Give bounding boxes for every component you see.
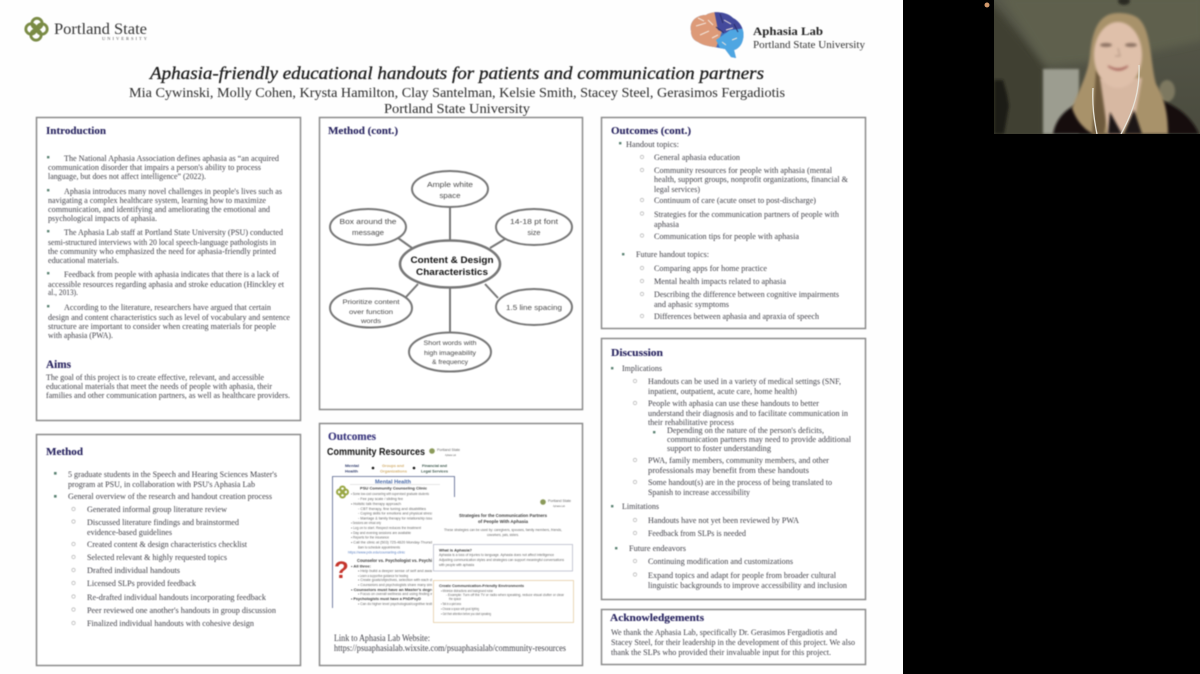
list: implications: their rehabilitative process [648, 418, 734, 427]
handout preview: community resources: Community Resources [327, 447, 425, 458]
list: method steps: Re-drafted individual handouts incorporating feedback [87, 593, 267, 602]
text block: introduction bullets: According to the literature, researchers have argued that certain [64, 303, 272, 312]
logo: Portland State University: Portland State [54, 21, 147, 38]
text block: introduction bullets: educational materials. [48, 256, 119, 265]
list: handout topics: health, support groups, nonprofit organizations, financial & [654, 175, 848, 184]
handout preview: strategies for communication partners: of People With Aphasia [478, 519, 528, 524]
heading: introduction: Introduction [46, 125, 106, 137]
handout preview: community resources: 8am to schedule appointments [358, 546, 400, 550]
list: limitations: Handouts have not yet been reviewed by PWA [648, 516, 799, 525]
text block: introduction bullets: accessible resources regarding aphasia and stroke education (Hinckley et [48, 280, 285, 289]
handout preview: community resources: • Reports for the insurance [351, 536, 389, 540]
handout preview: community resources: • Psychologists must have a PhD/PsyD [351, 597, 421, 601]
panel: method continued [320, 118, 582, 410]
list: handout topics: Strategies for the communication partners of people with [654, 210, 840, 219]
heading: method: Method [46, 446, 83, 458]
text block: aims: The goal of this project is to create effective, relevant, and accessible [46, 373, 264, 382]
list: future handout topics: Future handout topics: [636, 250, 709, 259]
handout preview: strategies for communication partners: - Example: Turn off the TV or radio when speaking, reduce visual clutter or clear [446, 593, 565, 597]
list: method steps: program at PSU, in collaboration with PSU's Aphasia Lab [68, 480, 255, 489]
text block: acknowledgements: Stacey Steel, for their leadership in the development of this project. We also [611, 638, 855, 647]
handout preview: community resources [327, 447, 460, 608]
heading: aims: Aims [46, 357, 71, 371]
logo: Aphasia Lab: Aphasia Lab [753, 24, 823, 38]
status dot [984, 2, 990, 8]
black sidebar [903, 0, 1200, 674]
logo: Portland State University [26, 18, 148, 41]
heading: acknowledgements: Acknowledgements [610, 612, 705, 624]
title: Aphasia-friendly educational handouts for patients and communication partners [149, 63, 764, 83]
affiliation: Portland State University [384, 102, 530, 117]
diagram: content and design characteristics: Characteristics [416, 267, 488, 278]
heading: outcomes: Outcomes [328, 429, 376, 443]
list: implications: Spanish to increase accessibility [648, 488, 751, 497]
handout preview: strategies for communication partners: • Choose a space with good lighting [441, 607, 479, 611]
handout preview: strategies for communication partners: Strategies for the Communication Partners [459, 513, 547, 518]
list: method steps: Finalized individual handouts with cohesive design [87, 619, 255, 628]
icon: brain [690, 11, 744, 59]
panel: method [36, 434, 300, 666]
handout preview: community resources: Counselor vs. Psychologist vs. Psychiatrist [357, 558, 443, 563]
list: implications: Some handout(s) are in the process of being translated to [648, 478, 832, 487]
handout preview: community resources: Aphasia Lab [445, 453, 456, 457]
handout preview: community resources: ◦ CBT therapy, fine tuning and disabilities [358, 507, 426, 511]
handout preview: strategies for communication partners: Aphasia is a loss of injuries to language. Aphasia does not affect intelligence [439, 553, 554, 557]
handout preview: strategies for communication partners: • Talk in a quiet area [441, 602, 461, 606]
diagram: content and design characteristics: Short words with [424, 340, 477, 347]
icon: PSU knot [26, 18, 47, 40]
diagram: content and design characteristics: message [352, 228, 384, 237]
handout preview: community resources: Legal Services [421, 470, 448, 474]
handout preview: community resources: PSU Community Counseling Clinic [360, 486, 428, 490]
list: implications: Depending on the nature of the person's deficits, [667, 426, 824, 435]
handout preview: community resources: ◦ Marriage & family therapy for relationship issues [358, 516, 436, 520]
diagram: content and design characteristics: space [440, 191, 460, 200]
handout preview: strategies for communication partners: Aphasia Lab [553, 504, 565, 508]
list: limitations: Feedback from SLPs is needed [648, 529, 747, 538]
list: method steps: Peer reviewed one another's handouts in group discussion [87, 606, 277, 615]
list: implications: support to foster understanding [667, 444, 772, 453]
handout preview: community resources: • Learn a supportive guidance for healing [358, 574, 408, 578]
list: implications: People with aphasia can use these handouts to better [648, 399, 819, 408]
list: future endeavors: Future endeavors [629, 544, 686, 553]
list: method steps: evidence-based guidelines [87, 528, 172, 537]
list: limitations: Limitations [622, 502, 659, 511]
text block: introduction bullets: navigating a complex healthcare system, learning how to maximize [48, 196, 266, 205]
authors: Mia Cywinski, Molly Cohen, Krysta Hamilton, Clay Santelman, Kelsie Smith, Stacey Steel, Gerasimos Fergadiotis [129, 86, 785, 101]
handout preview: strategies for communication partners: the space [449, 597, 461, 601]
handout preview: strategies for communication partners: Adjusting communication styles and strategies can support meaningful conversations [439, 558, 564, 562]
text block: acknowledgements [611, 628, 855, 657]
list: handout topics: Continuum of care (acute onset to post-discharge) [654, 196, 816, 205]
handout preview: strategies for communication partners: What is Aphasia? [439, 548, 473, 552]
handout preview: strategies for communication partners: with people with aphasia [439, 563, 474, 567]
handout preview: community resources: • Sessions are virtual only [351, 521, 381, 525]
handout preview: community resources: • Some low-cost counseling with supervised graduate students [351, 492, 429, 496]
handout preview: community resources: Groups and [382, 464, 405, 468]
diagram: content and design characteristics: 14-18 pt font [510, 217, 558, 226]
list: future endeavors: Expand topics and adapt for people from broader cultural [648, 571, 837, 580]
handout preview: community resources: • Counselors and psychologists share many similarities [358, 583, 443, 587]
text block: introduction bullets: al., 2013). [48, 288, 78, 297]
handout preview: community resources: • Counselors must have an Master's degree [351, 588, 436, 592]
handout preview: community resources: • Help build a deeper sense of self and awareness [358, 569, 443, 573]
diagram: content and design characteristics: high imageability [424, 350, 477, 357]
text block: introduction bullets: communication, and identifying and ameliorating the emotional and [48, 205, 271, 214]
list: implications: professionals may benefit from these handouts [648, 466, 809, 475]
handout preview: community resources: Financial and [422, 464, 448, 468]
handout preview: community resources: Portland State [437, 448, 460, 452]
text block: introduction bullets: design and content characteristics such as level of vocabulary and sentence [48, 313, 290, 322]
webcam video of presenter [985, 0, 1200, 140]
handout preview: community resources: • Call the clinic at (503) 725-4620 Monday-Thursday [351, 540, 436, 544]
text block: introduction bullets: Aphasia introduces many novel challenges in people's lives such as [64, 187, 282, 196]
logo: Aphasia Lab [688, 10, 866, 60]
handout preview: community resources: • Log on to start. Respect reduces the treatment [351, 526, 421, 530]
diagram: content and design characteristics: 1.5 line spacing [506, 303, 562, 312]
text block: introduction bullets: Feedback from people with aphasia indicates that there is a lack of [64, 270, 279, 279]
handout preview: community resources: ◦ Coping skills for emotions and physical stress [358, 512, 433, 516]
handout preview: community resources: • Day and evening sessions are available [351, 531, 411, 535]
heading: discussion: Discussion [611, 347, 663, 359]
list: limitations [611, 502, 799, 538]
list: method steps [54, 470, 277, 628]
text block: aims: families and other communication partners, as well as healthcare providers. [46, 391, 290, 400]
diagram: content and design characteristics: & frequency [432, 359, 469, 366]
diagram: content and design characteristics: Box around the [340, 217, 396, 226]
list: method steps: Created content & design characteristics checklist [87, 540, 248, 549]
list: handout topics [619, 140, 848, 241]
list: handout topics: Communication tips for people with aphasia [654, 232, 799, 241]
list: future handout topics: and aphasic symptoms [654, 300, 729, 309]
list: future handout topics: Differences between aphasia and apraxia of speech [654, 312, 820, 321]
handout preview: community resources: • Create goals/objectives, selection with each client [358, 578, 438, 582]
diagram: content and design characteristics: words [360, 318, 382, 325]
text block: introduction bullets: The Aphasia Lab staff at Portland State University (PSU) conducted [64, 228, 284, 237]
list: method steps: Discussed literature findings and brainstormed [87, 518, 240, 527]
list: future endeavors: linguistic backgrounds to improve accessibility and inclusion [648, 581, 848, 590]
list: implications [611, 364, 852, 497]
list: method steps: Selected relevant & highly requested topics [87, 553, 227, 562]
list: future handout topics [622, 250, 839, 321]
list: future endeavors [615, 544, 848, 590]
handout preview: strategies for communication partners: • Get their attention before you start speaking [441, 612, 491, 616]
handout preview: community resources: Health [345, 470, 359, 474]
text block: introduction bullets: structure are important to consider when creating materials for people [48, 322, 276, 331]
handout preview: community resources: Mental Health [375, 480, 411, 486]
text block: introduction bullets: psychological impacts of aphasia. [48, 214, 157, 223]
panel: introduction and aims [36, 118, 300, 420]
list: handout topics: legal services) [654, 185, 700, 194]
list: implications: Implications [622, 364, 662, 373]
list: handout topics: Handout topics: [626, 140, 679, 149]
handout preview: community resources: • All three: [351, 564, 371, 568]
text block: acknowledgements: thank the SLPs who provided their invaluable input for this project. [611, 648, 831, 657]
link to aphasia lab website: https://psuaphasialab.wixsite.com/psuaphasialab/community-resources [334, 643, 566, 653]
list: implications: Handouts can be used in a variety of medical settings (SNF, [648, 377, 841, 386]
handout preview: strategies for communication partners: coworkers, pals, sisters. [487, 533, 519, 537]
list: future handout topics: Comparing apps for home practice [654, 264, 767, 273]
handout preview: strategies for communication partners: Portland State [548, 499, 571, 503]
panel: outcomes continued [602, 118, 866, 328]
panel: outcomes [320, 424, 582, 666]
panel: discussion [602, 338, 866, 600]
link to aphasia lab website: Link to Aphasia Lab Website: [334, 633, 430, 643]
list: method steps: General overview of the research and handout creation process [68, 492, 272, 501]
handout preview: strategies for communication partners: Create Communication-Friendly Environments [439, 584, 524, 588]
list: handout topics: General aphasia education [654, 153, 741, 162]
handout preview: community resources: ◦ Fee pay scale / sliding fee [358, 497, 403, 501]
diagram: content and design characteristics: Content & Design [410, 255, 494, 266]
handout preview: community resources: • Holistic talk therapy approach [351, 502, 401, 506]
panel: acknowledgements [602, 610, 866, 664]
list: handout topics: Community resources for people with aphasia (mental [654, 166, 833, 175]
diagram: content and design characteristics [330, 171, 572, 372]
text block: introduction bullets: the community who emphasized the need for aphasia-friendly printed [48, 247, 277, 256]
handout preview: community resources: Organizations [380, 470, 407, 474]
diagram: content and design characteristics: Ample white [427, 180, 473, 189]
text block: introduction bullets: The National Aphasia Association defines aphasia as “an acquired [64, 154, 280, 163]
text block: aims: educational materials that meet the needs of people with aphasia, their [46, 382, 272, 391]
handout preview: community resources: Mental [345, 464, 359, 468]
text block: introduction bullets [47, 154, 290, 340]
text block: introduction bullets: language, but does not affect intelligence” (2022). [48, 172, 206, 181]
list: method steps: Drafted individual handouts [87, 566, 180, 575]
list: future handout topics: Describing the difference between cognitive impairments [654, 290, 839, 299]
text block: introduction bullets: semi-structured interviews with 20 local speech-language pathologists in [48, 238, 277, 247]
text block: introduction bullets: communication disorder that impairs a person's ability to process [48, 163, 261, 172]
slide background [0, 0, 903, 674]
text block: introduction bullets: with aphasia (PWA). [48, 331, 113, 340]
diagram: content and design characteristics: size [528, 228, 540, 237]
diagram: content and design characteristics: over function [349, 309, 393, 316]
list: implications: communication partners may need to provide additional [667, 435, 852, 444]
handout preview: community resources: ? [334, 557, 349, 584]
link to aphasia lab website [334, 633, 566, 653]
text block: acknowledgements: We thank the Aphasia Lab, specifically Dr. Gerasimos Fergadiotis and [611, 628, 838, 637]
list: future endeavors: Continuing modification and customizations [648, 557, 793, 566]
list: method steps: Generated informal group literature review [87, 505, 228, 514]
logo: Portland State University: UNIVERSITY [102, 36, 148, 41]
handout preview: strategies for communication partners [432, 497, 576, 624]
diagram: content and design characteristics: Prioritize content [342, 299, 400, 306]
list: method steps: Licensed SLPs provided feedback [87, 579, 197, 588]
list: method steps: 5 graduate students in the Speech and Hearing Sciences Master's [68, 470, 277, 479]
list: handout topics: aphasia [654, 220, 679, 229]
handout preview: community resources: https://www.pdx.edu/counseling-clinic [348, 550, 405, 554]
list: future handout topics: Mental health impacts related to aphasia [654, 277, 786, 286]
list: implications: understand their diagnosis and to facilitate communication in [648, 409, 849, 418]
handout preview: community resources: • Focus on overall wellness and using finding what [358, 592, 438, 596]
handout preview: strategies for communication partners: • Minimize distractions and background noise [441, 589, 493, 593]
heading: method cont: Method (cont.) [328, 125, 398, 137]
logo: Aphasia Lab: Portland State University [753, 40, 866, 51]
handout preview: community resources: • Can do higher level psychological/cognitive testing [358, 602, 436, 606]
heading: outcomes cont: Outcomes (cont.) [611, 125, 691, 137]
list: implications: inpatient, outpatient, acute care, home health) [648, 387, 797, 396]
text block: aims [46, 373, 290, 400]
list: implications: PWA, family members, community members, and other [648, 456, 829, 465]
handout preview: strategies for communication partners: These strategies can be used by: caregivers, spouses, family members, friends, [444, 528, 562, 532]
